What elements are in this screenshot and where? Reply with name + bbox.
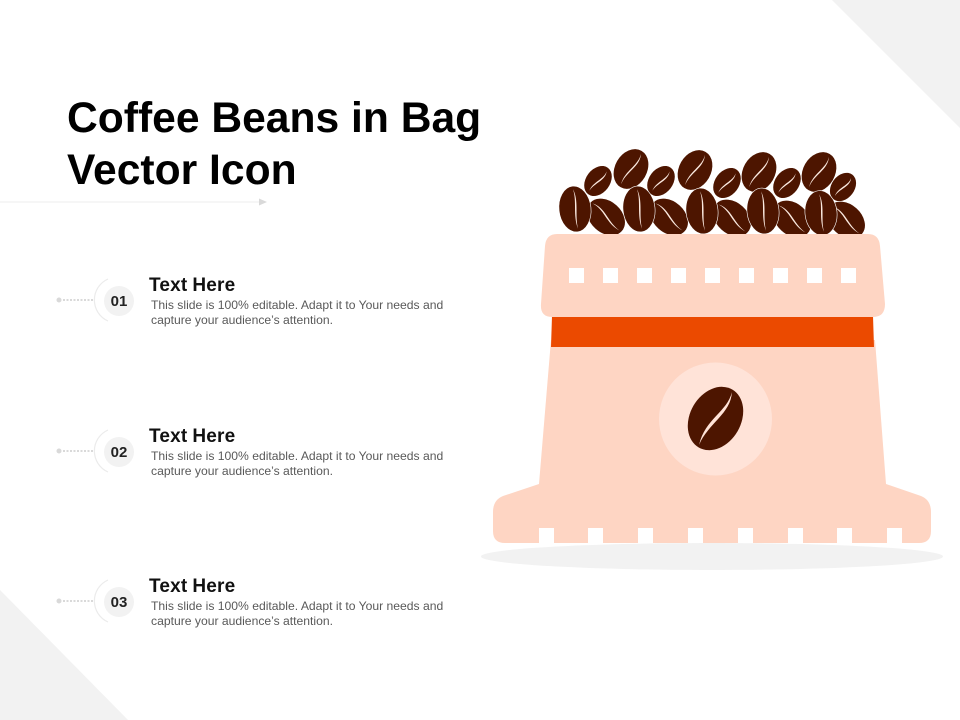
beans pile	[559, 149, 866, 234]
list item 02	[56, 426, 443, 478]
description 02: This slide is 100% editable. Adapt it to Your needs and	[151, 449, 443, 463]
bag body	[493, 340, 931, 543]
icon: label bean	[677, 377, 754, 460]
leaning lower beans	[590, 198, 866, 234]
bottom notches	[539, 528, 902, 543]
icon: coffee bag with beans	[481, 149, 943, 570]
number 02: 02	[111, 444, 127, 461]
description 03: This slide is 100% editable. Adapt it to Your needs and	[151, 599, 443, 613]
title	[67, 94, 481, 194]
description 03	[151, 599, 443, 628]
number 02	[104, 437, 134, 467]
top fold squares	[569, 268, 856, 283]
list item 03	[56, 576, 443, 628]
description 02	[151, 449, 443, 478]
title: Coffee Beans in Bag	[67, 94, 481, 142]
number 03: 03	[111, 594, 127, 611]
connector and arc 03	[56, 580, 108, 622]
bag top fold	[541, 234, 885, 317]
medium top beans	[614, 149, 836, 192]
corner decoration: bottom left	[0, 590, 128, 720]
description 02: capture your audience’s attention.	[151, 464, 333, 478]
number 01: 01	[111, 293, 127, 310]
description 01: capture your audience’s attention.	[151, 313, 333, 327]
connector and arc 02	[56, 430, 108, 472]
connector and arc 01	[56, 278, 108, 322]
description 01: This slide is 100% editable. Adapt it to Your needs and	[151, 298, 443, 312]
title: Vector Icon	[67, 146, 297, 194]
heading 02: Text Here	[149, 426, 235, 447]
arrow under title	[0, 198, 266, 206]
number 03	[104, 587, 134, 617]
corner decoration: top right	[832, 0, 960, 128]
heading 01: Text Here	[149, 275, 235, 296]
label circle	[659, 362, 772, 476]
upright front beans	[557, 184, 839, 237]
heading 03: Text Here	[149, 576, 235, 597]
description 03: capture your audience’s attention.	[151, 614, 333, 628]
list item 01	[56, 275, 443, 327]
description 01	[151, 298, 443, 327]
number 01	[104, 286, 134, 316]
orange band	[551, 316, 874, 347]
ground shadow	[481, 543, 943, 570]
small tilted beans	[584, 166, 856, 202]
